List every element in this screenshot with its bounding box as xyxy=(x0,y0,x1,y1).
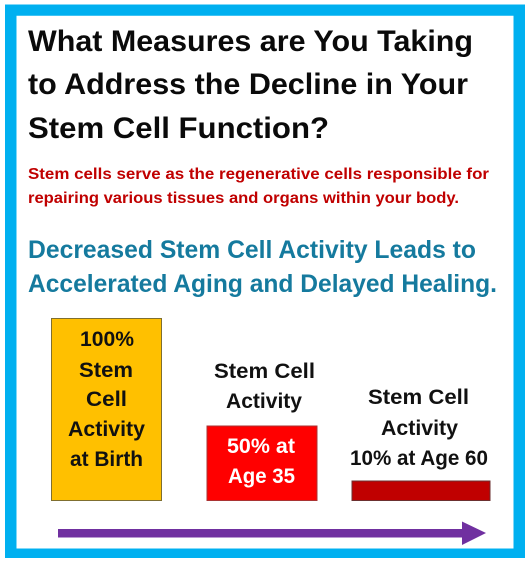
blue subheading: Accelerated Aging and Delayed Healing. xyxy=(28,270,497,298)
bar: 50% at age 35 xyxy=(207,426,317,500)
title xyxy=(28,25,473,145)
bar: 100% at birth: Stem xyxy=(79,359,133,382)
red description text: repairing various tissues and organs within your body. xyxy=(28,190,459,207)
title: What Measures are You Taking xyxy=(28,25,473,58)
blue subheading xyxy=(28,236,497,298)
title: Stem Cell Function? xyxy=(28,112,329,145)
blue subheading: Decreased Stem Cell Activity Leads to xyxy=(28,236,476,264)
label: stem cell activity age 35: Activity xyxy=(226,390,302,413)
red description text xyxy=(28,166,489,207)
red description text: Stem cells serve as the regenerative cells responsible for xyxy=(28,166,489,183)
label: stem cell activity age 60: Stem Cell xyxy=(368,386,469,409)
bar: 100% at birth: Cell xyxy=(86,388,127,411)
arrow: timeline xyxy=(58,522,486,545)
label: stem cell activity age 60 xyxy=(350,386,488,470)
bar: 10% at age 60 xyxy=(352,481,490,500)
bar: 100% at birth xyxy=(52,318,162,500)
bar: 100% at birth: at Birth xyxy=(70,448,143,471)
label: stem cell activity age 35: Stem Cell xyxy=(214,360,315,383)
label: stem cell activity age 60: 10% at Age 60 xyxy=(350,447,488,470)
bar: 50% at age 35: 50% at xyxy=(227,435,295,458)
title: to Address the Decline in Your xyxy=(28,68,468,101)
label: stem cell activity age 60: Activity xyxy=(381,417,458,440)
bar: 50% at age 35: Age 35 xyxy=(228,465,295,488)
bar: 100% at birth: 100% xyxy=(80,328,134,351)
bar: 100% at birth: Activity xyxy=(68,418,145,441)
label: stem cell activity age 35 xyxy=(214,360,315,413)
